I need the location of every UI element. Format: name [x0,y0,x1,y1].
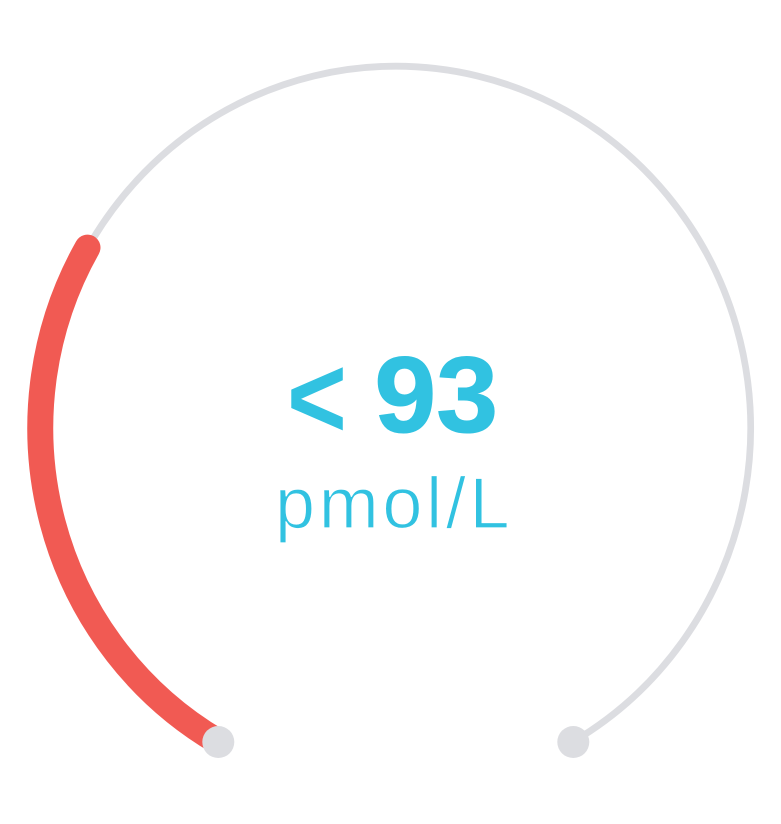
unit text: pmol/L [275,464,513,544]
left end dot [202,726,234,758]
value text [287,333,498,463]
gauge value arc [40,248,218,742]
gauge track arc [41,66,751,742]
value text: 93 [374,335,498,456]
value text: < [287,333,347,463]
right end dot [557,726,589,758]
